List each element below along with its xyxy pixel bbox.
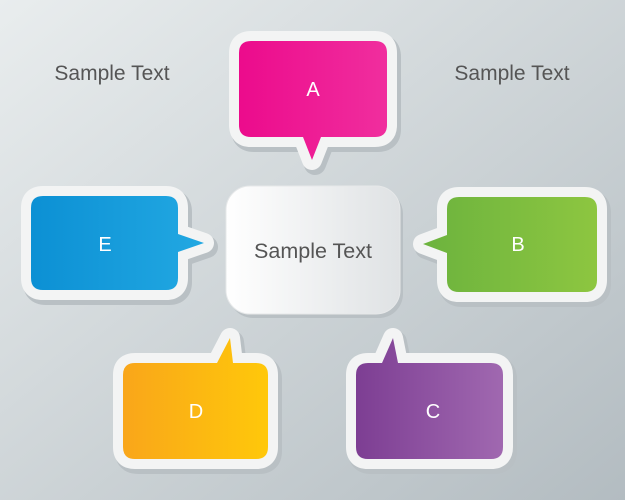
bubble D: D: [189, 401, 203, 423]
bubble A: [239, 41, 390, 164]
heading: sample text right: Sample Text: [454, 62, 570, 85]
bubble B: B: [511, 234, 525, 256]
bubble D: [123, 338, 271, 463]
bubble C: C: [426, 401, 440, 423]
bubble A: A: [306, 79, 320, 101]
center box: [226, 186, 403, 318]
bubble B: [423, 197, 600, 296]
bubble E: E: [98, 234, 112, 256]
heading: sample text left: Sample Text: [54, 62, 170, 85]
bubble C: [356, 338, 506, 463]
center box: Sample Text: [254, 239, 372, 263]
bubble E: [31, 196, 207, 294]
